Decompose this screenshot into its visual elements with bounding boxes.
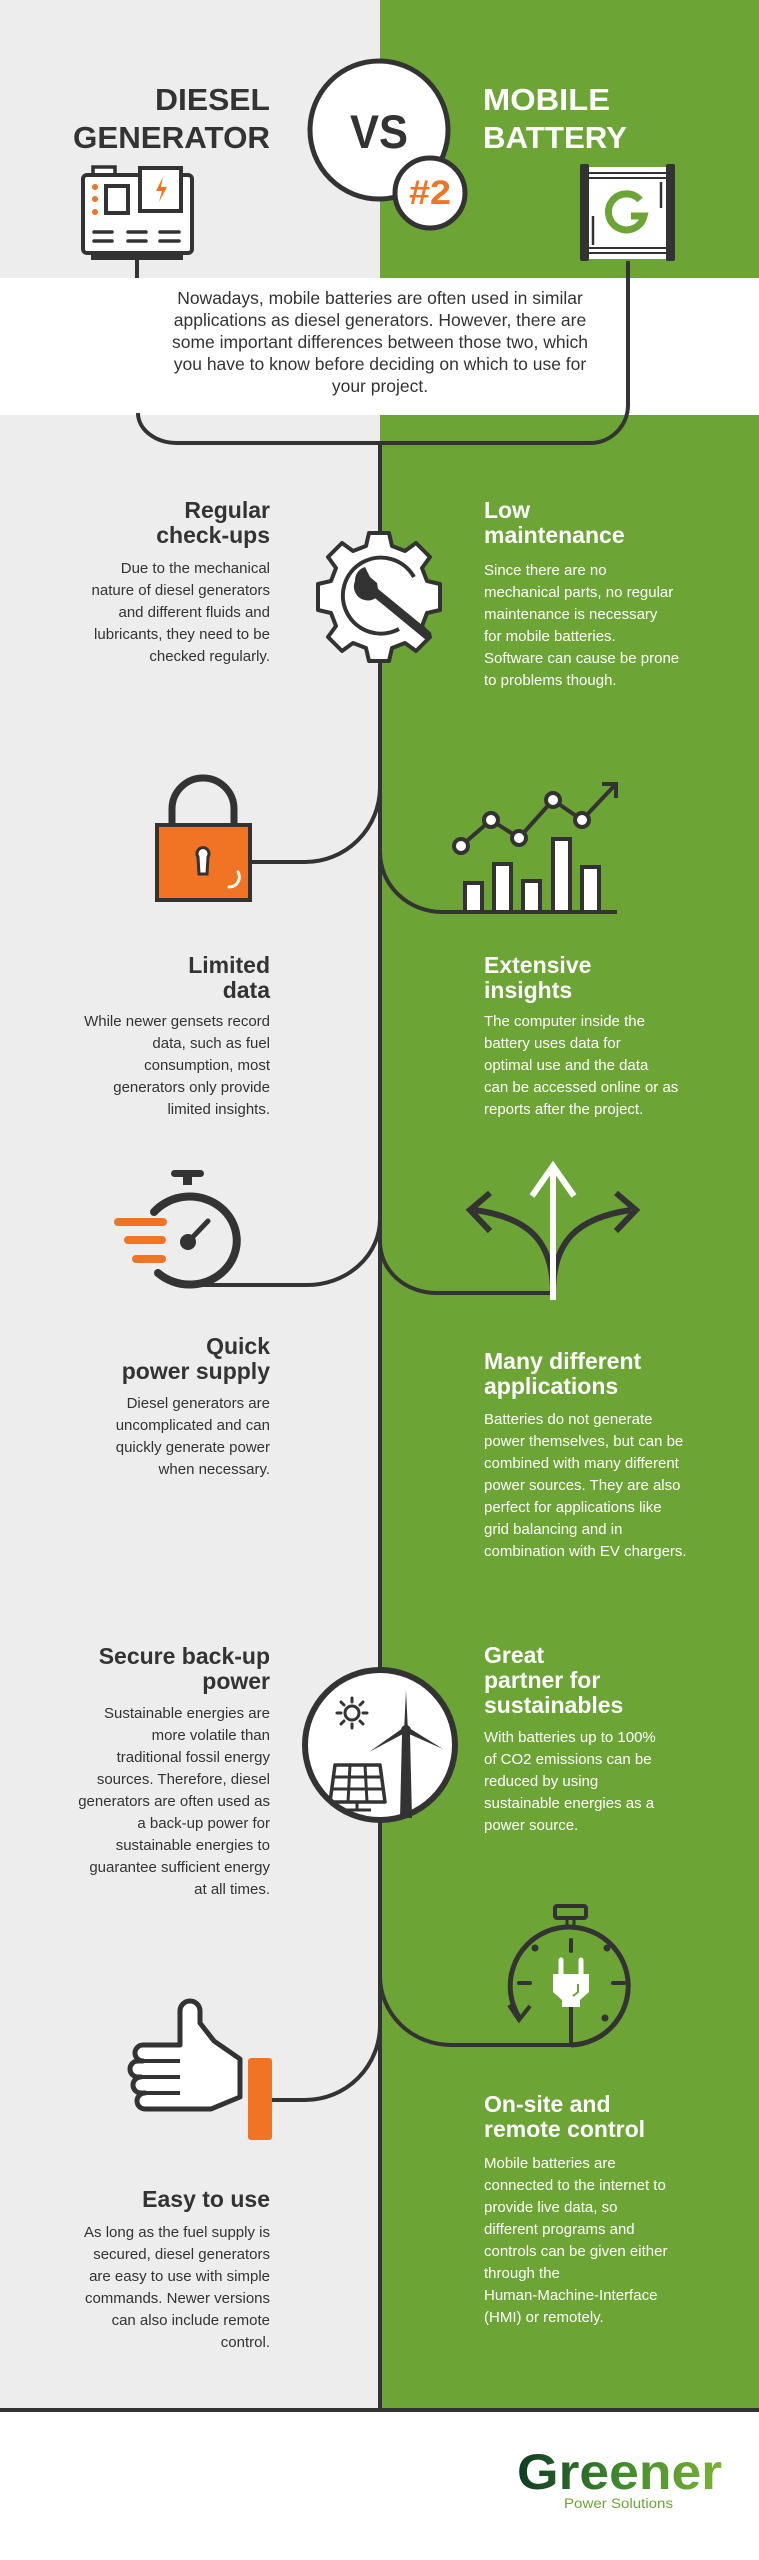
section: regular check-ups: Regular: [184, 497, 270, 523]
section: secure back-up power: a back-up power for: [137, 1815, 270, 1832]
section: great partner for sustainables: power source.: [484, 1817, 578, 1834]
section: secure back-up power: power: [202, 1668, 270, 1694]
section: easy to use: Easy to use: [142, 2186, 270, 2212]
icon: sustainable energy circle: [305, 1670, 455, 1820]
section: on-site and remote control: connected to the internet to: [484, 2177, 666, 2194]
icon: thumbs up: [130, 2001, 272, 2140]
section: many different applications: Batteries do not generate: [484, 1411, 652, 1428]
section: low maintenance: Since there are no: [484, 562, 607, 579]
intro text: Nowadays, mobile batteries are often used in similar: [177, 288, 583, 308]
background: left gray top: [0, 0, 380, 278]
section: on-site and remote control: controls can be given either: [484, 2243, 667, 2260]
section: on-site and remote control: [484, 2091, 667, 2326]
intro text: [172, 288, 588, 396]
section: limited data: limited insights.: [167, 1101, 270, 1118]
title: mobile battery: BATTERY: [483, 120, 627, 155]
section: easy to use: control.: [221, 2334, 270, 2351]
footer line: [0, 2408, 759, 2412]
section: great partner for sustainables: of CO2 emissions can be: [484, 1751, 652, 1768]
section: extensive insights: The computer inside the: [484, 1013, 645, 1030]
section: limited data: data, such as fuel: [152, 1035, 270, 1052]
section: secure back-up power: traditional fossil energy: [117, 1749, 270, 1766]
title: diesel generator: GENERATOR: [73, 120, 270, 155]
section: limited data: [84, 952, 271, 1118]
logo: Greener Power Solutions: Greener: [517, 2444, 722, 2500]
badge #2: [395, 158, 465, 228]
section: low maintenance: maintenance is necessary: [484, 606, 658, 623]
section: secure back-up power: sustainable energies to: [116, 1837, 270, 1854]
connector lines: [137, 260, 628, 2410]
section: limited data: Limited: [188, 952, 270, 978]
icon: chart: [454, 784, 616, 912]
background: right green top: [380, 0, 759, 278]
VS circle: [310, 61, 448, 199]
section: low maintenance: to problems though.: [484, 672, 617, 689]
intro text: applications as diesel generators. However, there are: [174, 310, 586, 330]
background: left gray body: [0, 415, 380, 2411]
section: easy to use: As long as the fuel supply is: [84, 2224, 270, 2241]
section: great partner for sustainables: [484, 1642, 656, 1834]
section: on-site and remote control: through the: [484, 2265, 560, 2282]
section: secure back-up power: at all times.: [194, 1881, 270, 1898]
section: great partner for sustainables: sustainables: [484, 1692, 623, 1718]
VS circle: VS: [350, 105, 408, 158]
intro text: your project.: [332, 376, 428, 396]
section: limited data: data: [223, 977, 270, 1003]
section: secure back-up power: Secure back-up: [99, 1643, 270, 1669]
section: easy to use: commands. Newer versions: [85, 2290, 270, 2307]
section: quick power supply: quickly generate power: [116, 1439, 270, 1456]
section: great partner for sustainables: partner for: [484, 1667, 600, 1693]
section: on-site and remote control: On-site and: [484, 2091, 611, 2117]
section: many different applications: [484, 1348, 687, 1560]
icon: lock: [157, 778, 250, 900]
section: extensive insights: Extensive: [484, 952, 591, 978]
title: diesel generator: DIESEL: [155, 82, 270, 117]
icon: plug clock: [509, 1906, 628, 2045]
section: regular check-ups: and different fluids and: [118, 604, 270, 621]
section: low maintenance: maintenance: [484, 522, 625, 548]
section: quick power supply: when necessary.: [158, 1461, 270, 1478]
section: easy to use: can also include remote: [112, 2312, 270, 2329]
section: regular check-ups: checked regularly.: [149, 648, 270, 665]
icon: gear with wrench: [318, 533, 440, 661]
section: on-site and remote control: Human-Machine-Interface: [484, 2287, 657, 2304]
section: secure back-up power: sources. Therefore, diesel: [97, 1771, 270, 1788]
section: regular check-ups: [92, 497, 270, 665]
section: secure back-up power: Sustainable energies are: [104, 1705, 270, 1722]
section: great partner for sustainables: reduced by using: [484, 1773, 598, 1790]
section: many different applications: applications: [484, 1373, 618, 1399]
section: low maintenance: Software can cause be prone: [484, 650, 679, 667]
title: diesel generator: [73, 82, 270, 155]
section: regular check-ups: nature of diesel generators: [92, 582, 270, 599]
icon: stopwatch: [118, 1170, 237, 1285]
background: right green body: [380, 415, 759, 2411]
section: secure back-up power: more volatile than: [152, 1727, 270, 1744]
section: quick power supply: Diesel generators are: [127, 1395, 270, 1412]
icon: direction arrows: [470, 1166, 636, 1300]
section: limited data: generators only provide: [113, 1079, 270, 1096]
section: regular check-ups: check-ups: [156, 522, 270, 548]
section: many different applications: power themselves, but can be: [484, 1433, 683, 1450]
section: regular check-ups: lubricants, they need to be: [94, 626, 270, 643]
section: easy to use: [84, 2186, 270, 2351]
section: quick power supply: power supply: [122, 1358, 270, 1384]
logo: Greener Power Solutions: Power Solutions: [564, 2495, 673, 2511]
section: quick power supply: uncomplicated and can: [116, 1417, 270, 1434]
section: on-site and remote control: (HMI) or remotely.: [484, 2309, 604, 2326]
section: low maintenance: [484, 497, 679, 689]
section: extensive insights: optimal use and the data: [484, 1057, 649, 1074]
section: many different applications: grid balancing and in: [484, 1521, 622, 1538]
section: quick power supply: [116, 1333, 270, 1478]
section: regular check-ups: Due to the mechanical: [121, 560, 270, 577]
background: white intro band: [0, 278, 759, 415]
section: extensive insights: can be accessed online or as: [484, 1079, 678, 1096]
section: many different applications: Many different: [484, 1348, 642, 1374]
section: many different applications: power sources. They are also: [484, 1477, 680, 1494]
section: low maintenance: Low: [484, 497, 530, 523]
intro text: you have to know before deciding on which to use for: [174, 354, 586, 374]
section: secure back-up power: [78, 1643, 270, 1898]
section: many different applications: combination with EV chargers.: [484, 1543, 687, 1560]
section: extensive insights: reports after the project.: [484, 1101, 643, 1118]
section: many different applications: perfect for applications like: [484, 1499, 662, 1516]
badge #2: #2: [409, 174, 451, 212]
section: low maintenance: mechanical parts, no regular: [484, 584, 673, 601]
intro text: some important differences between those two, which: [172, 332, 588, 352]
section: quick power supply: Quick: [206, 1333, 270, 1359]
section: extensive insights: [484, 952, 678, 1118]
section: extensive insights: insights: [484, 977, 572, 1003]
section: easy to use: secured, diesel generators: [93, 2246, 270, 2263]
title: mobile battery: [483, 82, 627, 155]
section: secure back-up power: guarantee sufficient energy: [89, 1859, 270, 1876]
section: extensive insights: battery uses data for: [484, 1035, 621, 1052]
section: great partner for sustainables: Great: [484, 1642, 544, 1668]
icon: diesel generator: [83, 167, 192, 260]
section: easy to use: are easy to use with simple: [89, 2268, 270, 2285]
icon: mobile battery: [580, 164, 675, 261]
section: on-site and remote control: Mobile batteries are: [484, 2155, 616, 2172]
section: great partner for sustainables: With batteries up to 100%: [484, 1729, 656, 1746]
section: low maintenance: for mobile batteries.: [484, 628, 616, 645]
section: limited data: consumption, most: [144, 1057, 271, 1074]
section: on-site and remote control: remote control: [484, 2116, 645, 2142]
section: many different applications: combined with many different: [484, 1455, 680, 1472]
section: on-site and remote control: provide live data, so: [484, 2199, 617, 2216]
section: on-site and remote control: different programs and: [484, 2221, 635, 2238]
section: secure back-up power: generators are often used as: [78, 1793, 270, 1810]
title: mobile battery: MOBILE: [483, 82, 610, 117]
section: great partner for sustainables: sustainable energies as a: [484, 1795, 655, 1812]
section: limited data: While newer gensets record: [84, 1013, 270, 1030]
